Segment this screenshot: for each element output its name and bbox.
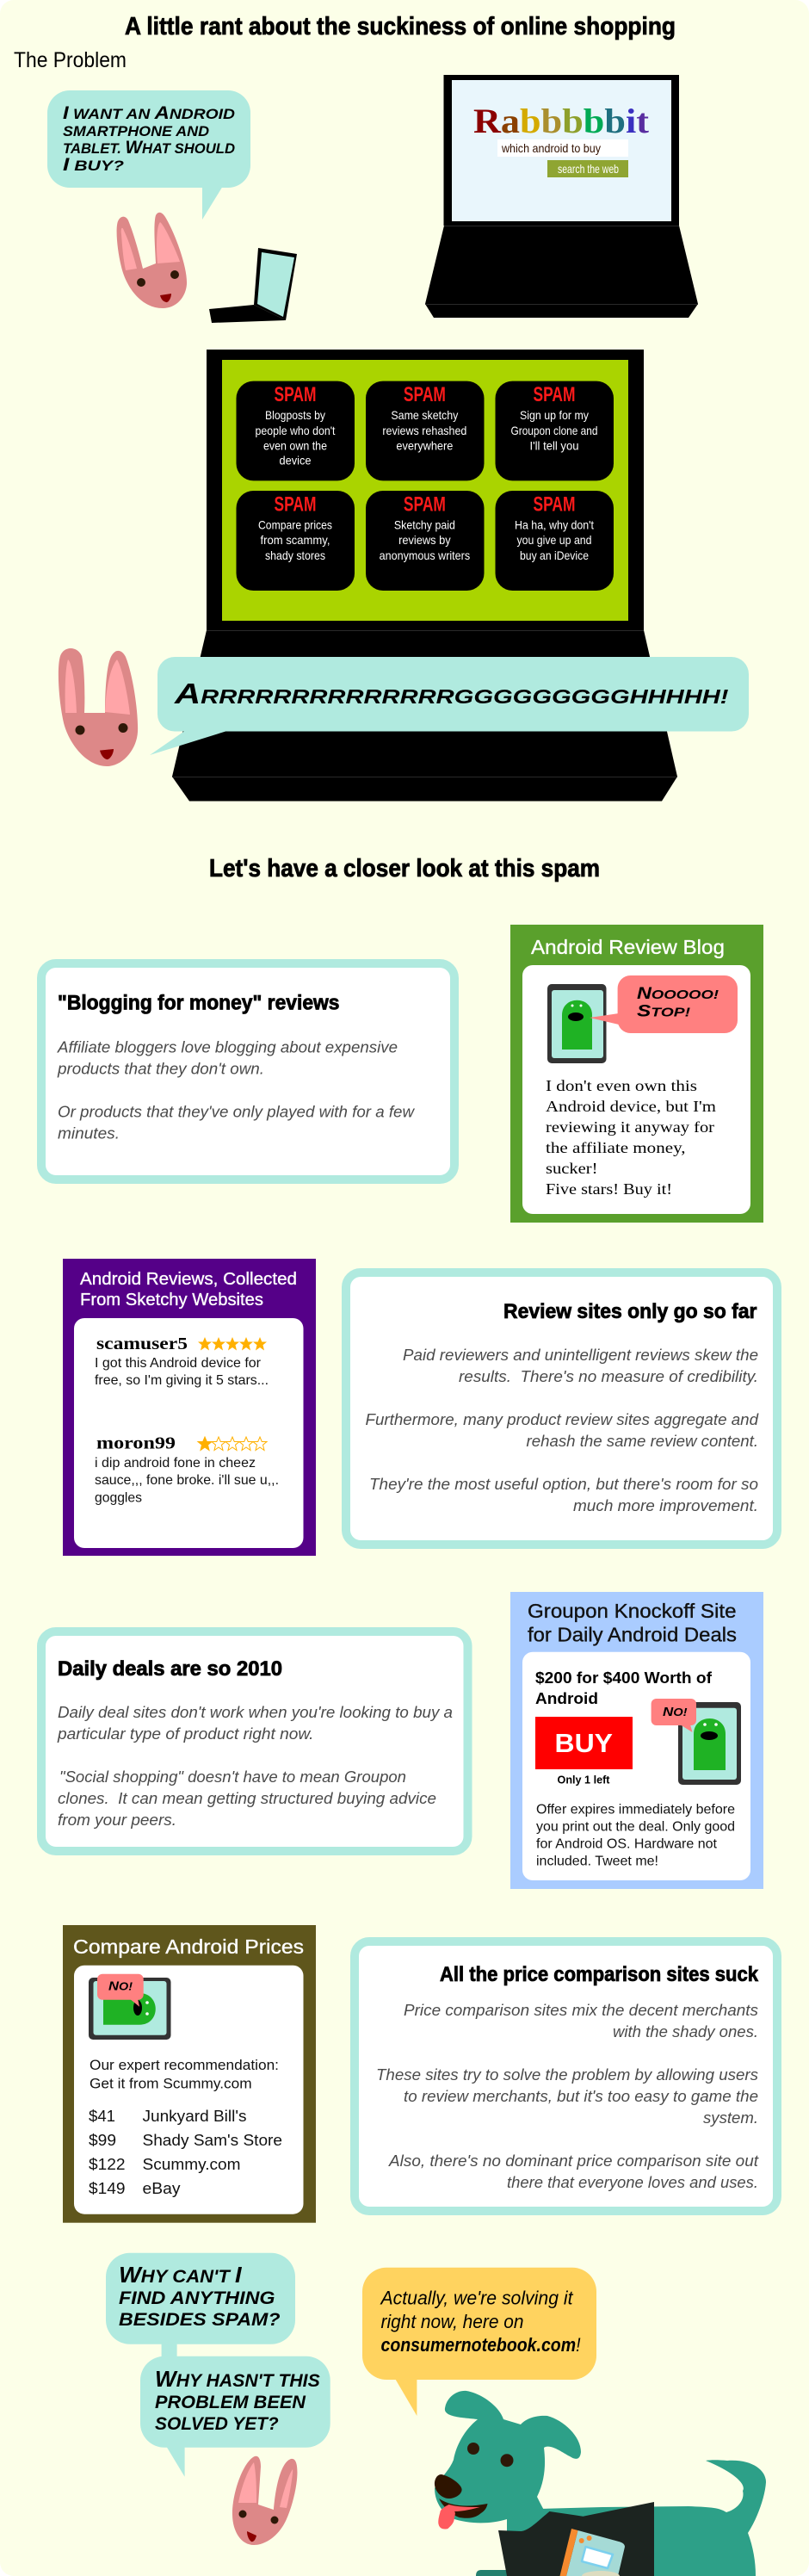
dog head and ears	[435, 2391, 581, 2531]
panel: android reviews collected: Android Reviews, Collected	[80, 1270, 297, 1289]
buy button: BUY	[554, 1728, 613, 1758]
panel body text: particular type of product right now.	[57, 1725, 313, 1743]
review text: sucker!	[546, 1160, 597, 1177]
speech bubble: what should I buy: I BUY?	[63, 155, 125, 175]
panel body text: They're the most useful option, but there's room for so	[369, 1476, 758, 1493]
dog vest	[498, 2502, 654, 2576]
panel body text	[57, 1704, 453, 1829]
review text	[546, 1077, 716, 1198]
speech bubble: consumernotebook: Actually, we're solving it	[380, 2288, 573, 2309]
panel: daily deals	[41, 1632, 468, 1851]
title: A little rant about the suckiness of online shopping	[125, 13, 676, 40]
heading: closer look: Let's have a closer look at this spam	[209, 855, 600, 882]
panel body text: system.	[703, 2109, 758, 2127]
speech bubble: why hasn't this been solved: PROBLEM BEEN	[155, 2393, 306, 2412]
speech bubble: what should I buy	[47, 90, 250, 220]
panel body text: with the shady ones.	[613, 2023, 758, 2040]
speech bubble: no	[652, 1699, 696, 1732]
review: scamuser5: free, so I'm giving it 5 stars...	[95, 1373, 269, 1388]
spam card 2: reviews rehashed	[382, 424, 466, 437]
review: moron99: i dip android fone in cheez	[95, 1456, 256, 1471]
spam card 5: reviews by	[398, 533, 451, 547]
panel heading: "Blogging for money" reviews	[58, 992, 339, 1015]
panel body text	[365, 1347, 759, 1514]
spam card 4: shady stores	[265, 548, 325, 562]
panel body text: Furthermore, many product review sites aggregate and	[365, 1411, 759, 1428]
five star rating	[198, 1337, 267, 1350]
review: scamuser5: scamuser5	[96, 1334, 188, 1353]
panel: blogging for money	[41, 963, 454, 1180]
panel: price comparison sites	[355, 1941, 777, 2211]
price list: $41	[89, 2108, 115, 2125]
speech bubble: what should I buy: TABLET. WHAT SHOULD	[63, 138, 235, 158]
notebook on vest	[559, 2529, 625, 2576]
spam card 2: everywhere	[396, 439, 454, 453]
panel body text: products that they don't own.	[57, 1061, 264, 1078]
deal terms: for Android OS. Hardware not	[536, 1837, 718, 1852]
review text: the affiliate money,	[546, 1139, 685, 1156]
panel: compare android prices: Compare Android Prices	[73, 1935, 304, 1958]
search logo: Rabbbbbit	[473, 102, 650, 140]
expert recommendation: Our expert recommendation:	[90, 2057, 279, 2073]
speech bubble: what should I buy: I WANT AN ANDROID	[63, 103, 235, 123]
review: scamuser5	[95, 1334, 269, 1388]
icon: bunny looking at laptop	[117, 213, 187, 308]
deal terms: you print out the deal. Only good	[536, 1820, 735, 1835]
icon: phone with android	[547, 984, 606, 1063]
panel body text: "Social shopping" doesn't have to mean Groupon	[59, 1768, 406, 1786]
panel: android review blog	[510, 925, 763, 1223]
icon: frustrated bunny	[59, 648, 138, 766]
spam card 2: Same sketchy	[391, 408, 458, 422]
expert recommendation: Get it from Scummy.com	[90, 2076, 252, 2092]
icon: bunny bottom	[232, 2456, 297, 2545]
spam card 1: Blogposts by	[265, 408, 325, 422]
panel: android reviews collected: From Sketchy Websites	[80, 1291, 263, 1310]
spam card 1: people who don't	[255, 424, 336, 437]
panel: android reviews collected	[63, 1259, 316, 1556]
search box	[497, 139, 628, 157]
speech bubble: why can't I find anything: FIND ANYTHING	[119, 2288, 275, 2308]
panel body text: These sites try to solve the problem by allowing users	[376, 2066, 758, 2084]
panel: groupon knockoff: Groupon Knockoff Site	[528, 1600, 737, 1622]
speech bubble: what should I buy: SMARTPHONE AND	[63, 123, 209, 139]
spam card 1: SPAM	[274, 383, 317, 406]
deal headline	[535, 1669, 713, 1707]
dog eyes	[467, 2443, 513, 2467]
panel body text: minutes.	[58, 1125, 120, 1142]
speech bubble: nooooo stop: STOP!	[637, 1003, 690, 1021]
speech bubble: why hasn't this been solved: WHY HASN'T THIS	[155, 2366, 320, 2392]
panel body text: results. There's no measure of credibility.	[459, 1368, 758, 1385]
panel body text: Also, there's no dominant price comparison site out	[388, 2152, 759, 2170]
panel body text: Or products that they've only played with for a few	[58, 1104, 415, 1121]
dog mouth	[439, 2499, 487, 2518]
price list: Shady Sam's Store	[143, 2132, 282, 2149]
panel body text	[57, 1039, 415, 1142]
speech bubble: consumernotebook	[362, 2268, 596, 2416]
dog tongue	[438, 2505, 480, 2529]
price list: eBay	[143, 2180, 181, 2197]
dog body and tail	[507, 2460, 766, 2576]
speech bubble: why can't I find anything	[106, 2253, 295, 2359]
deal terms: Offer expires immediately before	[536, 1803, 735, 1817]
review: moron99: moron99	[96, 1434, 176, 1453]
spam card 1: device	[279, 453, 312, 467]
review text: I don't even own this	[546, 1077, 697, 1094]
speech bubble: consumernotebook: right now, here on	[380, 2311, 523, 2332]
spam card 1	[236, 381, 355, 480]
spam card 5	[366, 491, 484, 591]
review: moron99	[95, 1434, 279, 1506]
spam card 1: even own the	[263, 439, 327, 453]
panel heading: All the price comparison sites suck	[440, 1963, 759, 1986]
speech bubble: no	[97, 1974, 144, 2007]
panel body text: clones. It can mean getting structured buying advice	[58, 1790, 436, 1807]
spam card 3: Sign up for my	[520, 408, 589, 422]
heading: the problem: The Problem	[14, 48, 127, 72]
speech bubble: nooooo stop	[590, 975, 738, 1033]
speech bubble: no: NO!	[663, 1705, 688, 1719]
icon: small laptop	[209, 248, 297, 323]
big laptop with search engine	[425, 75, 698, 318]
panel body text: rehash the same review content.	[527, 1433, 758, 1450]
panel body text: Paid reviewers and unintelligent reviews skew the	[403, 1347, 758, 1364]
spam card 5: anonymous writers	[380, 548, 470, 562]
panel: android review blog: Android Review Blog	[531, 936, 725, 958]
price list: $149	[89, 2180, 126, 2197]
review text: reviewing it anyway for	[546, 1118, 714, 1136]
spam card 3	[496, 381, 614, 480]
speech bubble: why can't I find anything: WHY CAN'T I	[119, 2262, 242, 2288]
deal headline: $200 for $400 Worth of	[535, 1669, 713, 1687]
speech bubble: why hasn't this been solved: SOLVED YET?	[155, 2414, 279, 2434]
spam card 6: SPAM	[534, 492, 575, 517]
review text: Android device, but I'm	[546, 1098, 716, 1115]
speech bubble: why hasn't this been solved	[140, 2356, 330, 2477]
speech bubble: why can't I find anything: BESIDES SPAM?	[119, 2310, 281, 2330]
review: moron99: sauce,,, fone broke. i'll sue u,,.	[95, 1473, 279, 1488]
review: scamuser5: I got this Android device for	[95, 1356, 262, 1371]
icon: sideways phone with android	[89, 1978, 170, 2040]
price list: $122	[89, 2156, 126, 2173]
spam card 2: SPAM	[404, 383, 446, 406]
one star rating	[198, 1437, 267, 1450]
spam card 3: I'll tell you	[530, 439, 578, 453]
panel heading: Daily deals are so 2010	[58, 1657, 282, 1681]
panel body text: Daily deal sites don't work when you're looking to buy a	[58, 1704, 453, 1721]
big laptop full of spam	[172, 350, 677, 801]
deal terms	[536, 1803, 735, 1869]
speech bubble: argh	[150, 657, 749, 755]
spam card 3: Groupon clone and	[511, 424, 597, 437]
only 1 left: Only 1 left	[558, 1774, 610, 1786]
dog far paw	[476, 2570, 508, 2576]
review text: Five stars! Buy it!	[546, 1180, 672, 1198]
panel: groupon knockoff	[510, 1592, 763, 1889]
spam card 6: you give up and	[516, 533, 592, 547]
panel body text: there that everyone loves and uses.	[507, 2174, 758, 2191]
panel body text: Affiliate bloggers love blogging about expensive	[57, 1039, 398, 1056]
price list	[89, 2108, 282, 2197]
speech bubble: nooooo stop: NOOOOO!	[637, 985, 719, 1003]
panel body text: Price comparison sites mix the decent merchants	[404, 2002, 758, 2019]
buy button	[535, 1717, 633, 1769]
price list: Junkyard Bill's	[143, 2108, 246, 2125]
spam card 6	[496, 491, 614, 591]
panel body text: from your peers.	[58, 1811, 176, 1829]
review: moron99: goggles	[95, 1491, 142, 1506]
spam card 5: SPAM	[404, 492, 446, 517]
deal headline: Android	[535, 1690, 598, 1707]
search box: which android to buy	[501, 141, 601, 155]
icon: phone with android	[678, 1702, 741, 1785]
price list: Scummy.com	[143, 2156, 241, 2173]
deal terms: included. Tweet me!	[536, 1855, 658, 1869]
spam card 4	[236, 491, 355, 591]
dog nose	[435, 2474, 462, 2499]
speech bubble: consumernotebook: consumernotebook.com!	[380, 2334, 580, 2356]
panel heading: Review sites only go so far	[503, 1300, 757, 1323]
panel body text: to review merchants, but it's too easy to game the	[404, 2088, 758, 2105]
price list: $99	[89, 2132, 116, 2149]
spam card 4: SPAM	[274, 492, 317, 517]
spam card 6: buy an iDevice	[520, 548, 589, 562]
spam card 6: Ha ha, why don't	[515, 518, 594, 532]
panel: review sites	[346, 1273, 777, 1545]
speech bubble: argh: A RRRRRRRRRRRRRRGGGGGGGGGHHHHH!	[174, 678, 729, 709]
search button	[547, 160, 628, 177]
spam card 5: Sketchy paid	[394, 518, 455, 532]
panel: groupon knockoff: for Daily Android Deals	[528, 1624, 737, 1646]
panel body text	[376, 2002, 759, 2191]
search button: search the web	[558, 162, 619, 176]
spam card 4: from scammy,	[260, 533, 330, 547]
icon: teal dog	[435, 2391, 766, 2576]
speech bubble: no: NO!	[108, 1979, 133, 1994]
spam card 2	[366, 381, 484, 480]
panel: compare android prices	[63, 1925, 316, 2223]
spam card 4: Compare prices	[258, 518, 332, 532]
expert recommendation	[90, 2057, 279, 2092]
panel body text: much more improvement.	[573, 1497, 758, 1514]
spam card 3: SPAM	[534, 383, 575, 406]
